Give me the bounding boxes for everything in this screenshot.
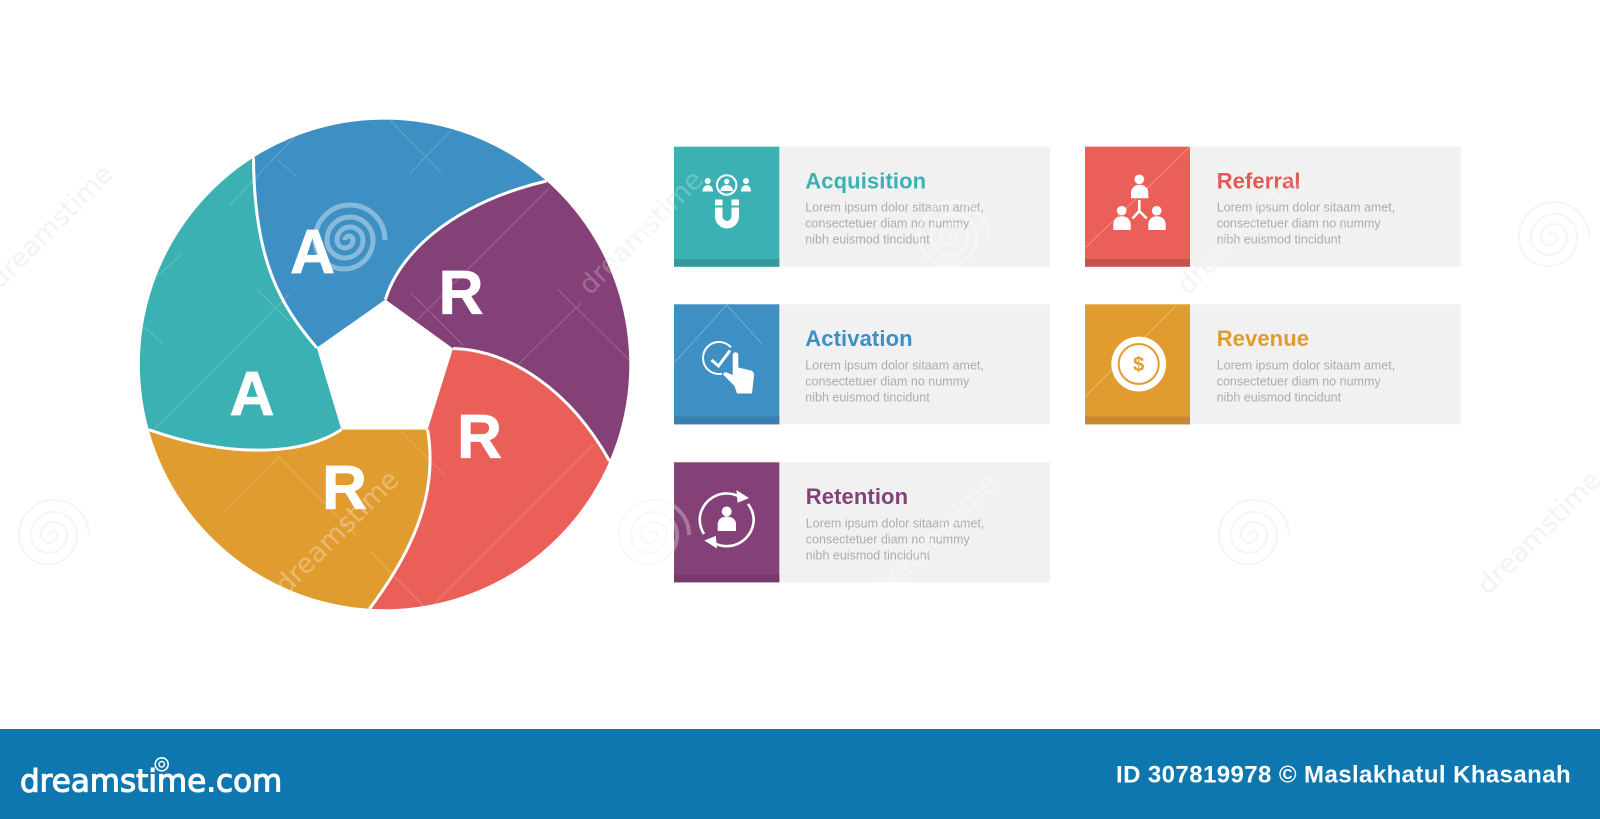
icon: people and magnet	[702, 175, 751, 229]
description: nibh euismod tincidunt	[805, 233, 930, 247]
description: Lorem ipsum dolor sitaam amet,	[805, 201, 984, 215]
card: Acquisition	[674, 147, 1050, 267]
foreground watermark: dreamstime	[1171, 164, 1308, 301]
description: nibh euismod tincidunt	[1217, 233, 1342, 247]
description: Lorem ipsum dolor sitaam amet,	[805, 358, 984, 372]
description: consectetuer diam no nummy	[1217, 374, 1381, 388]
foreground watermark: dreamstime	[573, 164, 710, 301]
description: consectetuer diam no nummy	[805, 217, 970, 231]
title: Retention	[806, 484, 908, 509]
letter A (blue segment): A	[290, 218, 335, 287]
description: consectetuer diam no nummy	[805, 374, 970, 388]
background watermark: dreamstime	[1171, 164, 1308, 301]
description: Lorem ipsum dolor sitaam amet,	[1217, 358, 1395, 372]
foreground watermark: dreamstime	[269, 464, 406, 601]
circular AARRR diagram	[140, 120, 629, 609]
description: consectetuer diam no nummy	[1217, 217, 1381, 231]
card: Activation	[674, 304, 1050, 424]
image id and author credit: ID 307819978 © Maslakhatul Khasanah	[1116, 761, 1571, 788]
background watermark	[0, 158, 1600, 601]
card: Revenue	[1085, 304, 1461, 424]
foreground watermark	[269, 164, 1308, 605]
background watermark: dreamstime	[573, 164, 710, 301]
title: Activation	[805, 326, 913, 351]
segment: Activation (teal)	[140, 158, 341, 450]
description: nibh euismod tincidunt	[805, 390, 930, 404]
icon: dollar coin	[1111, 337, 1166, 391]
letter R (purple segment): R	[439, 259, 483, 328]
segment: Retention (red)	[370, 348, 610, 609]
description: Lorem ipsum dolor sitaam amet,	[1217, 201, 1395, 215]
segment: Revenue (orange)	[149, 430, 430, 609]
letter R (red segment): R	[457, 403, 502, 472]
segment: Referral (purple)	[385, 181, 629, 461]
description: nibh euismod tincidunt	[806, 548, 931, 562]
letter R (orange segment): R	[322, 454, 367, 523]
description: Lorem ipsum dolor sitaam amet,	[806, 516, 984, 530]
description: nibh euismod tincidunt	[1217, 390, 1342, 404]
icon: person in circular arrows	[700, 491, 754, 548]
title: Acquisition	[805, 168, 926, 193]
icon: referral network of people	[1113, 174, 1166, 230]
card: Referral	[1085, 147, 1461, 267]
title: Revenue	[1217, 326, 1309, 351]
icon: tap with check mark	[703, 342, 754, 394]
description: consectetuer diam no nummy	[806, 532, 971, 546]
icon: dollar coin: $	[1133, 354, 1144, 376]
card: Retention	[674, 462, 1050, 582]
footer logo: dreamstime.com	[20, 764, 282, 800]
letter A (teal segment): A	[230, 360, 274, 429]
segment: Acquisition (blue)	[254, 120, 547, 348]
footer bar	[0, 729, 1600, 819]
foreground watermark: dreamstime	[867, 468, 1004, 605]
title: Referral	[1217, 168, 1301, 193]
